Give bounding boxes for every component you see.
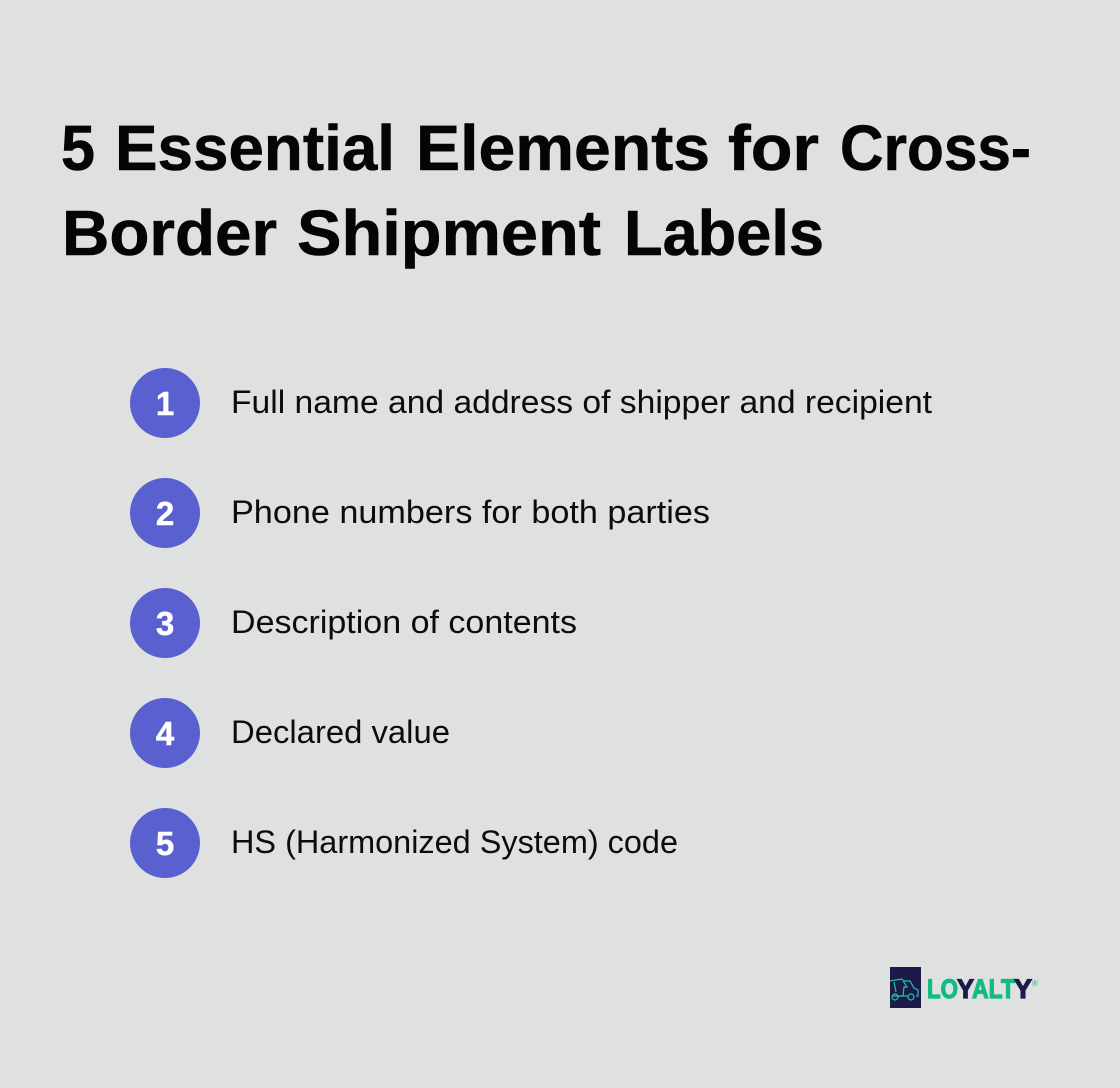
title: Elements	[416, 112, 710, 184]
list item 1	[130, 368, 932, 438]
list item 2	[130, 478, 710, 548]
list item 1: Full name and address of shipper and recipient	[231, 384, 932, 420]
logo: Loyalty	[890, 967, 1038, 1008]
title: Essential	[115, 112, 395, 184]
list item 4: 4	[156, 715, 175, 752]
logo wordmark: ALT	[972, 974, 1015, 1004]
list item 4: Declared value	[231, 714, 450, 750]
title: Labels	[624, 197, 824, 269]
title: Cross-	[840, 112, 1031, 184]
list item 5	[130, 808, 678, 878]
list item 2: 2	[156, 495, 174, 532]
icon: truck badge	[890, 967, 921, 1008]
logo wordmark	[927, 974, 1038, 1004]
list item 5: 5	[156, 825, 174, 862]
title	[61, 112, 1031, 269]
list item 3	[130, 588, 577, 658]
title: 5	[61, 112, 95, 184]
logo wordmark: LO	[927, 974, 958, 1004]
logo wordmark: Y	[957, 974, 974, 1004]
logo wordmark: ®	[1032, 979, 1038, 988]
logo wordmark: Y	[1014, 974, 1032, 1004]
list item 3: 3	[156, 605, 174, 642]
title: Shipment	[297, 197, 601, 269]
list item 3: Description of contents	[231, 604, 577, 640]
list item 4	[130, 698, 450, 768]
list item 1: 1	[156, 385, 174, 422]
title: for	[728, 112, 819, 184]
list item 2: Phone numbers for both parties	[231, 494, 710, 530]
title: Border	[62, 197, 277, 269]
list item 5: HS (Harmonized System) code	[231, 824, 678, 860]
